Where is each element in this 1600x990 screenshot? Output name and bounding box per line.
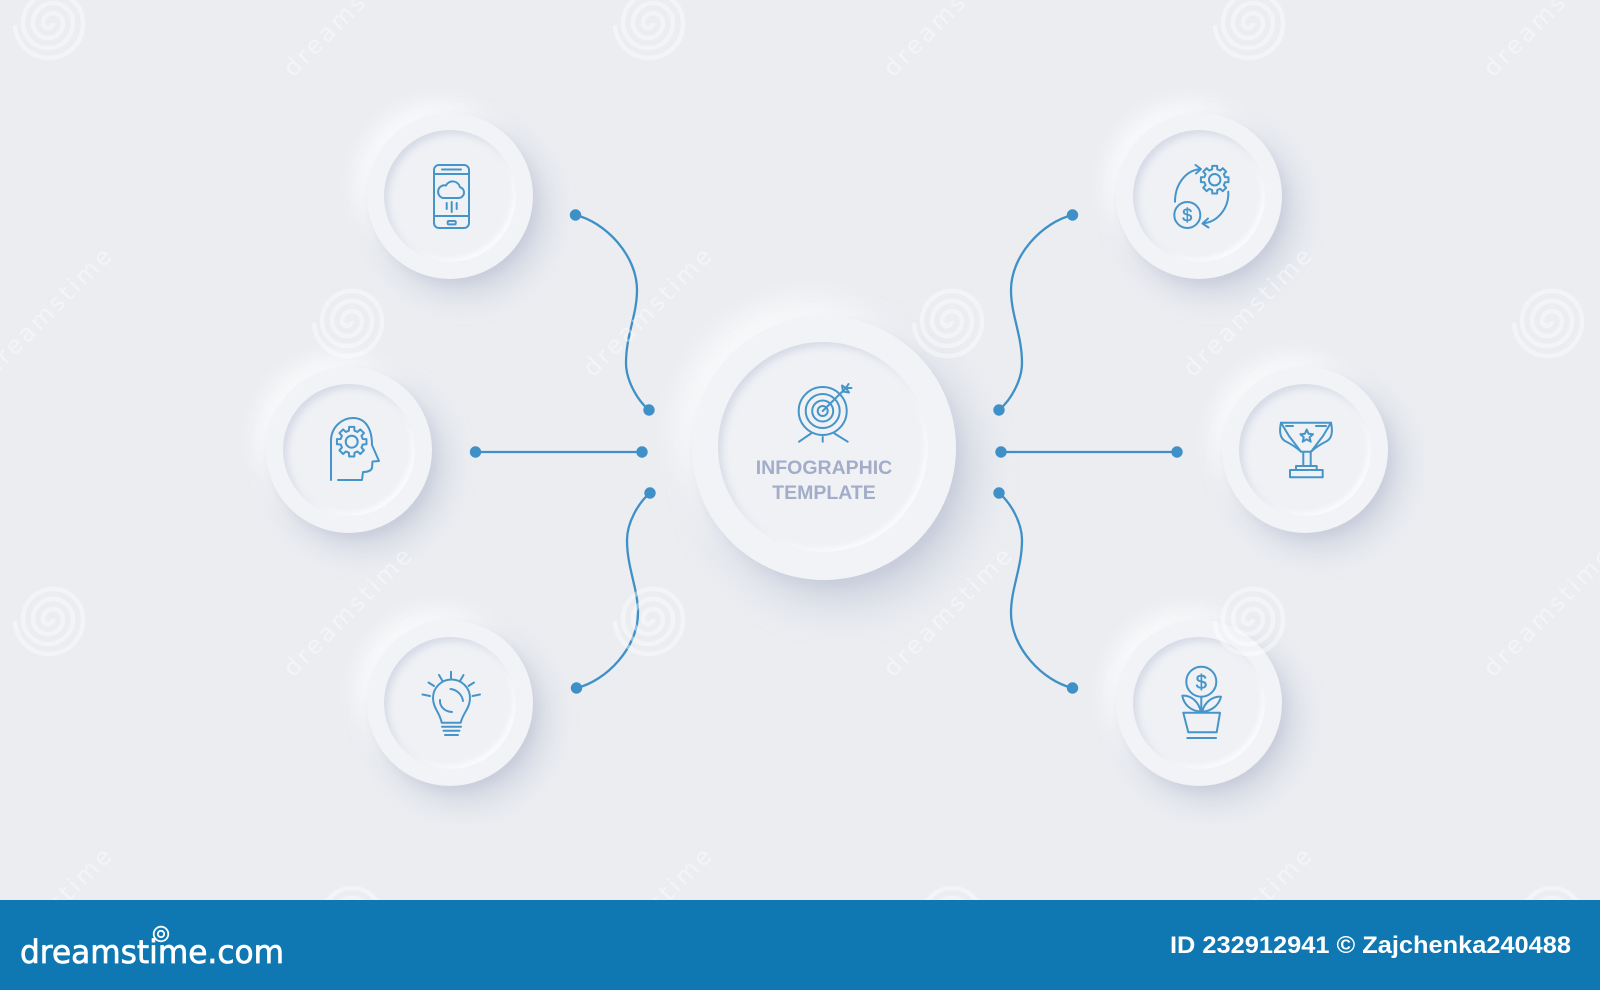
watermark overlay: dreamstime — [577, 242, 717, 382]
watermark overlay: dreamstime — [577, 842, 717, 982]
heading: infographic template: INFOGRAPHIC — [756, 457, 892, 479]
panel: top-left node, phone icon — [367, 113, 533, 279]
icon: gear and dollar cycle: $ — [1182, 206, 1192, 226]
heading: infographic template: TEMPLATE — [772, 482, 876, 504]
panel: top-right node, money and gear cycle icon — [1116, 113, 1282, 279]
icon: plant with dollar coin: $ — [1196, 672, 1207, 694]
icon: trophy — [1279, 422, 1333, 478]
logo: dreamstime.com: dreamstime.com — [20, 933, 284, 971]
credit text: ID 232912941 © Zajchenka240488 — [1170, 932, 1571, 959]
panel: bottom-right node, money plant icon — [1116, 620, 1282, 786]
heading: infographic template — [756, 457, 892, 504]
watermark overlay: dreamstime — [1177, 242, 1317, 382]
panel: middle-right node, trophy icon — [1222, 367, 1388, 533]
watermark overlay: dreamstime — [1177, 842, 1317, 982]
watermark overlay: dreamstime — [277, 542, 417, 682]
footer banner — [0, 900, 1600, 990]
icon: light bulb — [422, 670, 481, 736]
icon: gear and dollar cycle — [1173, 164, 1230, 229]
panel: central node — [692, 316, 956, 580]
panel: middle-left node, head icon — [266, 367, 432, 533]
icon: plant with dollar coin — [1181, 666, 1222, 739]
watermark overlay: dreamstime — [877, 542, 1017, 682]
panel: bottom-left node, bulb icon — [367, 620, 533, 786]
icon: target with arrow — [798, 383, 852, 443]
icon: head with gear — [330, 417, 380, 481]
icon: smartphone with rain cloud — [433, 164, 470, 229]
